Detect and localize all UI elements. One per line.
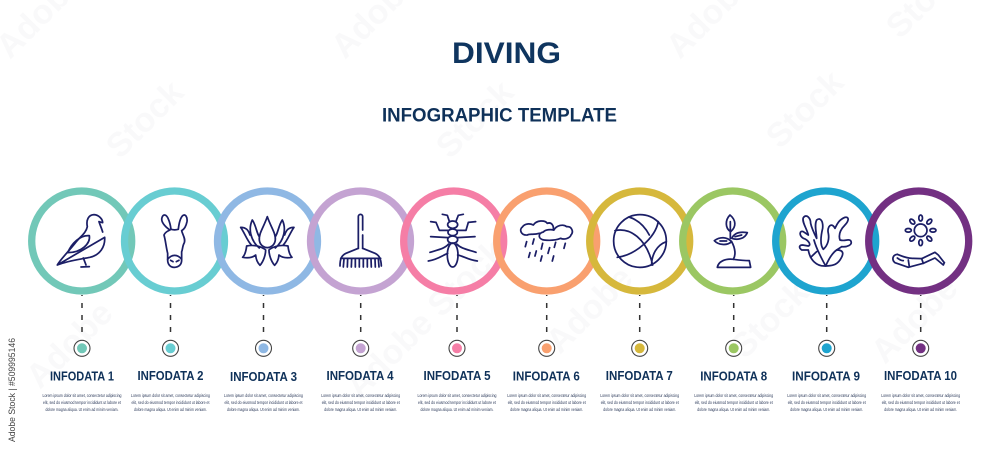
body text 4 xyxy=(321,393,401,412)
heading 6: INFODATA 6 xyxy=(513,370,580,384)
body text 9 xyxy=(787,393,867,412)
body text 4: dolore magna aliqua. Ut enim ad minim veniam. xyxy=(324,407,397,412)
body text 2 xyxy=(131,393,211,412)
body text 7: Lorem ipsum dolor sit amet, consectetur adipiscing xyxy=(600,393,680,398)
panel: infodata 6 xyxy=(497,191,597,412)
panel: infodata 10 xyxy=(869,191,969,412)
heading 4: INFODATA 4 xyxy=(326,369,394,383)
body text 1: dolore magna aliqua. Ut enim ad minim veniam. xyxy=(46,407,118,412)
ring 9 xyxy=(776,191,876,291)
icon: ant xyxy=(428,214,477,267)
marker 1 xyxy=(74,340,90,356)
marker 7 xyxy=(632,340,648,356)
heading 8: INFODATA 8 xyxy=(700,370,767,384)
body text 6: Lorem ipsum dolor sit amet, consectetur adipiscing xyxy=(507,393,587,398)
watermark pattern: Adobe xyxy=(864,269,965,371)
body text 3: Lorem ipsum dolor sit amet, consectetur adipiscing xyxy=(224,393,304,398)
panel: infodata 5 xyxy=(404,191,504,412)
ring 3 xyxy=(218,191,318,291)
body text 9: Lorem ipsum dolor sit amet, consectetur adipiscing xyxy=(787,393,867,398)
subtitle: INFOGRAPHIC TEMPLATE xyxy=(382,106,617,126)
body text 8: Lorem ipsum dolor sit amet, consectetur adipiscing xyxy=(694,393,774,398)
ring 6 xyxy=(497,191,597,291)
panel: infodata 3 xyxy=(218,191,318,412)
icon: lotus xyxy=(241,217,294,265)
connector 5 xyxy=(456,295,458,333)
icon: rain cloud xyxy=(521,221,572,261)
body text 3 xyxy=(224,393,304,412)
connector 9 xyxy=(826,295,828,333)
connector 6 xyxy=(546,295,548,333)
panel: infodata 2 xyxy=(124,191,224,412)
body text 5 xyxy=(418,393,497,412)
body text 5: elit, sed do eiusmod tempor incididunt ut labore et xyxy=(418,400,497,405)
panel: infodata 4 xyxy=(310,191,410,412)
body text 4: Lorem ipsum dolor sit amet, consectetur adipiscing xyxy=(321,393,401,398)
icon: sprout xyxy=(714,215,751,267)
body text 3: elit, sed do eiusmod tempor incididunt ut labore et xyxy=(224,400,303,405)
body text 8 xyxy=(694,393,774,412)
body text 7: elit, sed do eiusmod tempor incididunt ut labore et xyxy=(601,400,679,405)
heading 5: INFODATA 5 xyxy=(424,369,491,383)
watermark pattern: Stock xyxy=(759,63,851,156)
connector 2 xyxy=(170,295,172,333)
icon: basketball xyxy=(614,215,666,267)
heading 10: INFODATA 10 xyxy=(884,369,957,383)
body text 6 xyxy=(507,393,587,412)
body text 9: dolore magna aliqua. Ut enim ad minim veniam. xyxy=(790,407,863,412)
watermark pattern: Stock xyxy=(724,273,816,366)
connector 7 xyxy=(639,295,641,333)
marker 4 xyxy=(353,340,369,356)
body text 8: dolore magna aliqua. Ut enim ad minim veniam. xyxy=(697,407,770,412)
body text 10: elit, sed do eiusmod tempor incididunt ut labore et xyxy=(882,400,960,405)
panel: infodata 9 xyxy=(776,191,876,412)
body text 10: dolore magna aliqua. Ut enim ad minim veniam. xyxy=(884,407,957,412)
connector 10 xyxy=(920,295,922,333)
heading 7: INFODATA 7 xyxy=(606,369,673,383)
body text 3: dolore magna aliqua. Ut enim ad minim veniam. xyxy=(227,407,300,412)
watermark pattern: Stock xyxy=(99,73,191,166)
ring 5 xyxy=(404,191,504,291)
ring 4 xyxy=(310,191,410,291)
watermark pattern: Adobe Stock xyxy=(339,232,513,406)
connector 1 xyxy=(81,295,83,333)
icon: bird xyxy=(57,215,105,267)
icon: sunbathing person xyxy=(893,215,944,267)
title: DIVING xyxy=(452,37,561,70)
panel: infodata 7 xyxy=(590,191,690,412)
body text 5: Lorem ipsum dolor sit amet, consectetur adipiscing xyxy=(418,393,497,398)
marker 9 xyxy=(819,340,835,356)
panel: infodata 8 xyxy=(683,191,783,412)
heading 9: INFODATA 9 xyxy=(792,370,860,384)
body text 10: Lorem ipsum dolor sit amet, consectetur adipiscing xyxy=(881,393,961,398)
body text 1: Lorem ipsum dolor sit amet, consectetur adipiscing xyxy=(42,393,122,398)
marker 3 xyxy=(256,340,272,356)
body text 5: dolore magna aliqua. Ut enim ad minim veniam. xyxy=(420,407,494,412)
body text 8: elit, sed do eiusmod tempor incididunt ut labore et xyxy=(695,400,773,405)
body text 10 xyxy=(881,393,961,412)
panel: infodata 1 xyxy=(32,191,132,412)
body text 6: elit, sed do eiusmod tempor incididunt ut labore et xyxy=(508,400,586,405)
ring 8 xyxy=(683,191,783,291)
ring 2 xyxy=(124,191,224,291)
ring 7 xyxy=(590,191,690,291)
heading 1: INFODATA 1 xyxy=(50,370,114,384)
heading 3: INFODATA 3 xyxy=(230,370,297,384)
icon: rake xyxy=(340,214,381,267)
watermark pattern: Adobe xyxy=(539,259,640,361)
body text 2: elit, sed do eiusmod tempor incididunt ut labore et xyxy=(132,400,210,405)
marker 6 xyxy=(539,340,555,356)
ring 10 xyxy=(869,191,969,291)
body text 4: elit, sed do eiusmod tempor incididunt ut labore et xyxy=(322,400,400,405)
watermark pattern: Stock xyxy=(429,73,521,166)
vertical stock id text: Adobe Stock | #509995146 xyxy=(7,338,17,442)
body text 2: Lorem ipsum dolor sit amet, consectetur adipiscing xyxy=(131,393,211,398)
ring 1 xyxy=(32,191,132,291)
body text 1: elit, sed do eiusmod tempor incididunt ut labore et xyxy=(43,400,122,405)
marker 2 xyxy=(162,340,178,356)
connector 8 xyxy=(733,295,735,333)
connector 3 xyxy=(262,295,264,333)
body text 2: dolore magna aliqua. Ut enim ad minim veniam. xyxy=(134,407,207,412)
marker 10 xyxy=(913,340,929,356)
body text 7 xyxy=(600,393,680,412)
connector 4 xyxy=(360,295,362,333)
body text 9: elit, sed do eiusmod tempor incididunt ut labore et xyxy=(788,400,866,405)
heading 2: INFODATA 2 xyxy=(138,369,204,383)
watermark pattern: Adobe xyxy=(19,294,120,396)
marker 5 xyxy=(449,340,465,356)
body text 6: dolore magna aliqua. Ut enim ad minim veniam. xyxy=(510,407,583,412)
body text 1 xyxy=(42,393,122,412)
body text 7: dolore magna aliqua. Ut enim ad minim veniam. xyxy=(603,407,676,412)
icon: coral xyxy=(800,216,851,266)
marker 8 xyxy=(726,340,742,356)
icon: donkey xyxy=(162,215,187,267)
